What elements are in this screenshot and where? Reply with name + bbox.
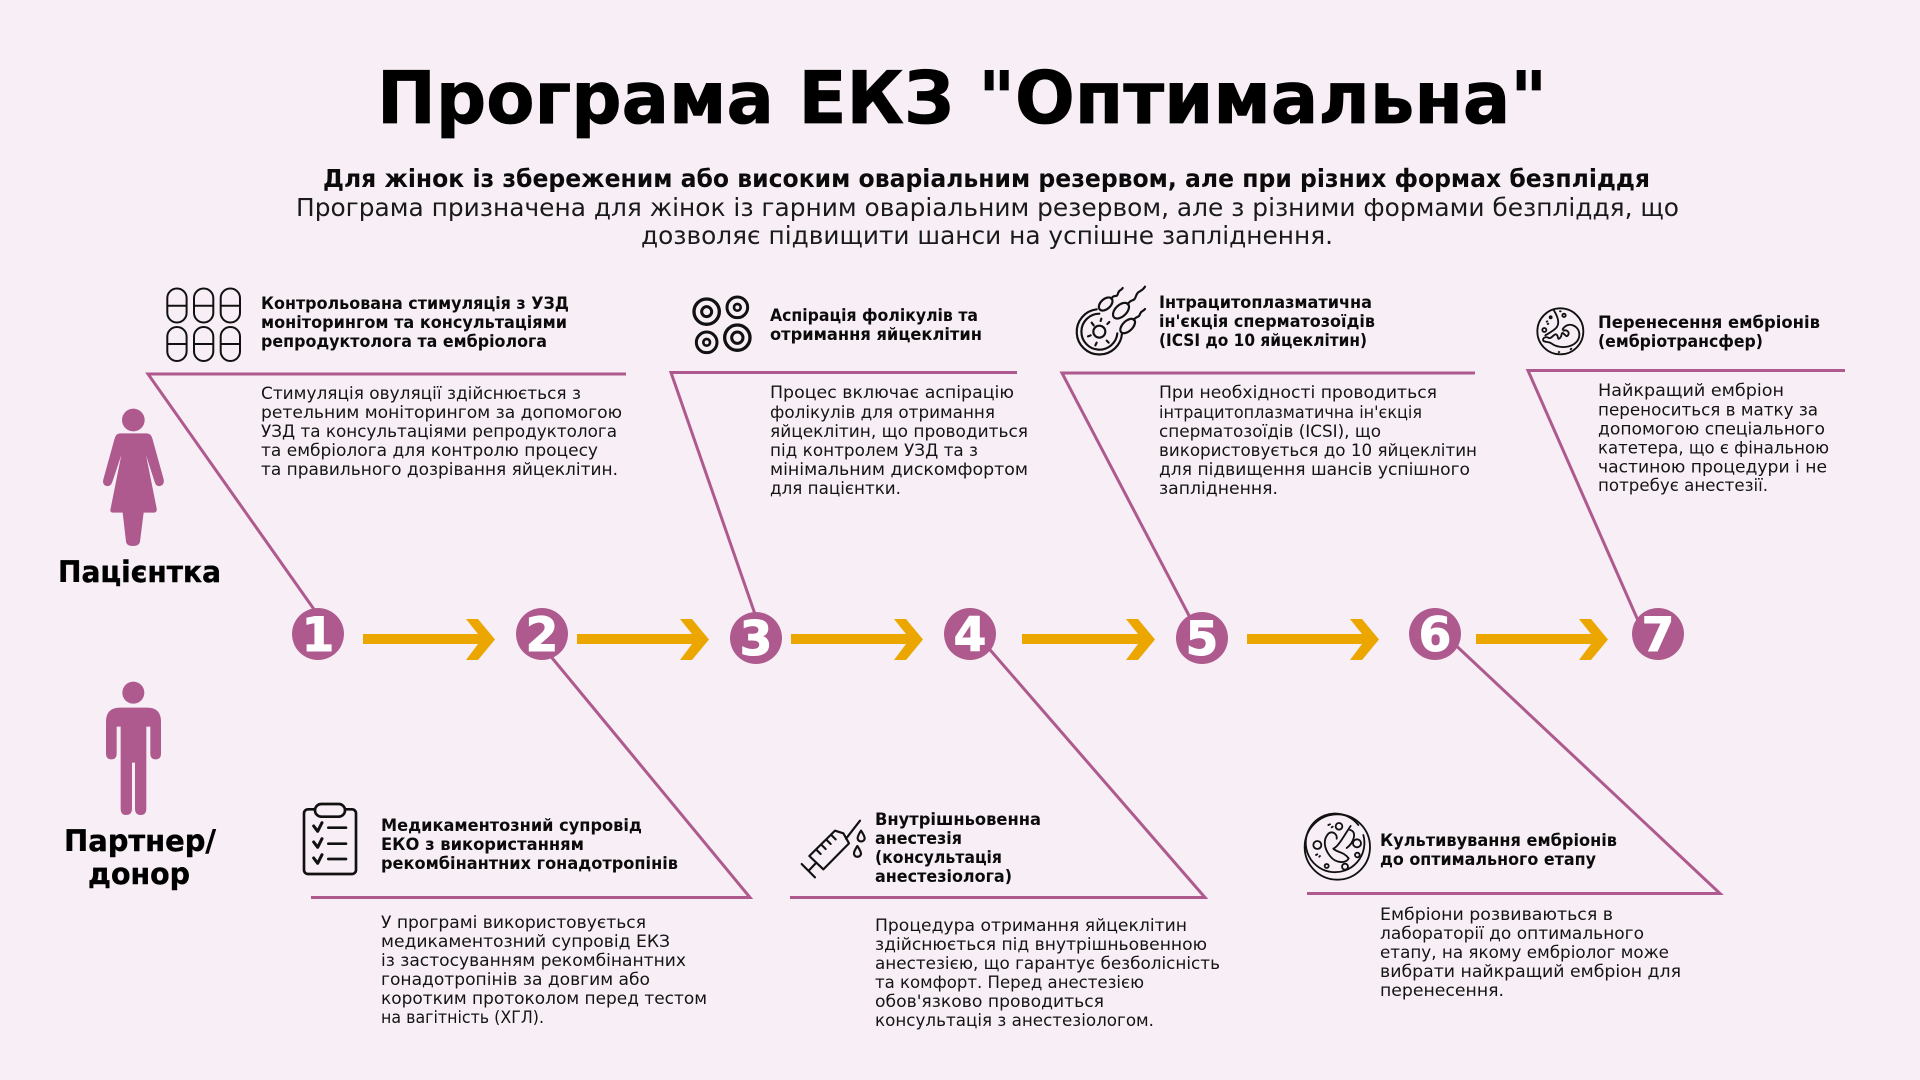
subtitle block	[296, 164, 1679, 250]
title: Програма ЕКЗ "Оптимальна"	[377, 56, 1547, 140]
heading: step 3: отримання яйцеклітин	[770, 325, 982, 344]
panel: step 4 anesthesia	[790, 644, 1220, 1030]
text: step 5: для підвищення шансів успішного	[1159, 460, 1470, 479]
connector: step 3	[671, 372, 1017, 617]
icon: pills	[167, 288, 240, 361]
icon: embryo	[1537, 308, 1583, 354]
heading: step 2: Медикаментозний супровід	[381, 816, 642, 835]
heading: step 2	[381, 816, 678, 873]
timeline arrows	[363, 619, 1608, 660]
text: step 7: Найкращий ембріон	[1598, 381, 1784, 400]
badge 7	[1632, 608, 1684, 663]
text: step 6: лабораторії до оптимального	[1380, 924, 1644, 943]
badge 2: 2	[526, 608, 558, 663]
icon: syringe	[802, 821, 865, 877]
text: step 4	[875, 916, 1220, 1030]
text: step 2: на вагітність (ХГЛ).	[381, 1008, 544, 1027]
badge 4	[944, 608, 996, 663]
text: step 1: Стимуляція овуляції здійснюється з	[261, 384, 581, 403]
connector: step 2	[311, 653, 750, 898]
icon: clipboard	[304, 804, 356, 874]
badge 1	[292, 608, 344, 663]
panel: step 3 aspiration	[671, 297, 1028, 617]
text: step 4: та комфорт. Перед анестезією	[875, 973, 1144, 992]
figure: patient	[58, 409, 221, 589]
badge 5	[1176, 612, 1228, 667]
text: step 7	[1598, 381, 1829, 495]
step number badges	[292, 608, 1684, 667]
heading: step 7: (ембріотрансфер)	[1598, 332, 1763, 351]
heading: step 6: до оптимального етапу	[1380, 850, 1596, 869]
subtitle block: Для жінок із збереженим або високим оваріальним резервом, але при різних формах безпліддя	[323, 164, 1650, 193]
heading: step 4: Внутрішньовенна	[875, 810, 1041, 829]
heading: step 6	[1380, 831, 1617, 869]
text: step 2: У програмі використовується	[381, 913, 646, 932]
text: step 3: яйцеклітин, що проводиться	[770, 422, 1028, 441]
heading: step 5: Інтрацитоплазматична	[1159, 293, 1372, 312]
badge 1: 1	[302, 608, 334, 663]
text: step 6: Ембріони розвиваються в	[1380, 905, 1613, 924]
arrow: 3 to 4	[791, 619, 923, 660]
connector: step 6	[1307, 638, 1720, 894]
connector: step 5	[1062, 373, 1475, 627]
text: step 2: із застосуванням рекомбінантних	[381, 951, 686, 970]
text: step 6	[1380, 905, 1681, 1000]
badge 5: 5	[1186, 612, 1218, 667]
text: step 6: перенесення.	[1380, 981, 1504, 1000]
heading: step 2: рекомбінантних гонадотропінів	[381, 854, 678, 873]
text: step 3: фолікулів для отримання	[770, 403, 995, 422]
arrow: 6 to 7	[1476, 619, 1608, 660]
text: step 5: При необхідності проводиться	[1159, 383, 1437, 402]
text: step 4: анестезією, що гарантує безболісність	[875, 954, 1220, 973]
heading: step 5	[1159, 293, 1375, 350]
text: step 2: коротким протоколом перед тестом	[381, 989, 707, 1008]
badge 2	[516, 608, 568, 663]
heading: step 1: Контрольована стимуляція з УЗД	[261, 294, 569, 313]
icon: woman	[103, 409, 164, 546]
connector: step 4	[790, 644, 1205, 898]
badge 7: 7	[1642, 608, 1674, 663]
text: step 7: потребує анестезії.	[1598, 476, 1768, 495]
heading: step 3: Аспірація фолікулів та	[770, 306, 978, 325]
text: step 1: ретельним моніторингом за допомогою	[261, 403, 622, 422]
panel: step 7 transfer	[1528, 308, 1845, 625]
text: step 2	[381, 913, 707, 1027]
icon: follicles	[694, 297, 750, 353]
text: step 4: Процедура отримання яйцеклітин	[875, 916, 1187, 935]
heading: step 3	[770, 306, 982, 344]
heading: step 7: Перенесення ембріонів	[1598, 313, 1820, 332]
text: step 4: здійснюється під внутрішньовенною	[875, 935, 1207, 954]
subtitle block: дозволяє підвищити шанси на успішне запліднення.	[641, 221, 1333, 250]
text: step 3: для пацієнтки.	[770, 479, 901, 498]
heading: step 4: анестезіолога)	[875, 867, 1012, 886]
heading: step 1	[261, 294, 569, 351]
heading: step 5: (ICSI до 10 яйцеклітин)	[1159, 331, 1367, 350]
text: step 7: допомогою спеціального	[1598, 420, 1825, 438]
text: step 3: під контролем УЗД та з	[770, 441, 978, 460]
heading: step 4	[875, 810, 1041, 886]
badge 4: 4	[954, 608, 986, 663]
label: partner or donor	[64, 824, 216, 891]
text: step 1: УЗД та консультаціями репродуктолога	[261, 422, 617, 441]
text: step 6: етапу, на якому ембріолог може	[1380, 943, 1669, 962]
text: step 3: Процес включає аспірацію	[770, 383, 1014, 402]
text: step 5	[1159, 383, 1477, 498]
text: step 5: сперматозоїдів (ICSI), що	[1159, 422, 1381, 441]
icon: embryo culture dish	[1305, 814, 1370, 880]
badge 3	[730, 612, 782, 667]
heading: step 1: репродуктолога та ембріолога	[261, 332, 547, 351]
label: patient: Пацієнтка	[58, 555, 221, 589]
icon: ICSI sperm and egg	[1077, 287, 1145, 355]
connector: step 1	[148, 374, 626, 615]
text: step 2: гонадотропінів за довгим або	[381, 970, 650, 989]
heading: step 1: моніторингом та консультаціями	[261, 313, 567, 332]
badge 6	[1409, 608, 1461, 663]
arrow: 4 to 5	[1022, 619, 1155, 660]
text: step 2: медикаментозний супровід ЕКЗ	[381, 932, 670, 951]
panel: step 6 culture	[1305, 638, 1720, 1000]
panel: step 1 stimulation	[148, 288, 626, 615]
text: step 4: обов'язково проводиться	[875, 992, 1104, 1011]
text: step 1	[261, 384, 622, 479]
text: step 4: консультація з анестезіологом.	[875, 1011, 1154, 1030]
arrow: 2 to 3	[577, 619, 709, 660]
text: step 7: катетера, що є фінальною	[1598, 438, 1829, 458]
heading: step 5: ін'єкція сперматозоїдів	[1159, 312, 1375, 331]
heading: step 2: ЕКО з використанням	[381, 835, 584, 854]
connector: step 7	[1528, 370, 1845, 625]
text: step 7: переноситься в матку за	[1598, 400, 1818, 420]
badge 6: 6	[1419, 608, 1451, 663]
text: step 1: та ембріолога для контролю процесу	[261, 441, 598, 460]
panel: step 5 ICSI	[1062, 287, 1477, 627]
text: step 6: вибрати найкращий ембріон для	[1380, 962, 1681, 981]
panel: step 2 medication	[304, 653, 750, 1027]
arrow: 1 to 2	[363, 619, 495, 660]
heading: step 7	[1598, 313, 1820, 351]
text: step 5: інтрацитоплазматична ін'єкція	[1159, 403, 1422, 422]
label: partner or donor: Партнер/	[64, 824, 216, 858]
heading: step 4: анестезія	[875, 829, 962, 848]
arrow: 5 to 6	[1247, 619, 1379, 660]
text: step 5: запліднення.	[1159, 479, 1278, 498]
heading: step 4: (консультація	[875, 848, 1002, 867]
text: step 5: використовується до 10 яйцеклітин	[1159, 441, 1477, 460]
heading: step 6: Культивування ембріонів	[1380, 831, 1617, 850]
figure: partner	[64, 682, 216, 891]
text: step 1: та правильного дозрівання яйцеклітин.	[261, 460, 618, 479]
icon: man	[106, 682, 161, 815]
label: partner or donor: донор	[88, 857, 190, 891]
text: step 7: частиною процедури і не	[1598, 458, 1827, 476]
text: step 3	[770, 383, 1028, 498]
text: step 3: мінімальним дискомфортом	[770, 460, 1028, 479]
subtitle block: Програма призначена для жінок із гарним оваріальним резервом, але з різними формами безпліддя, що	[296, 193, 1679, 222]
badge 3: 3	[740, 612, 772, 667]
